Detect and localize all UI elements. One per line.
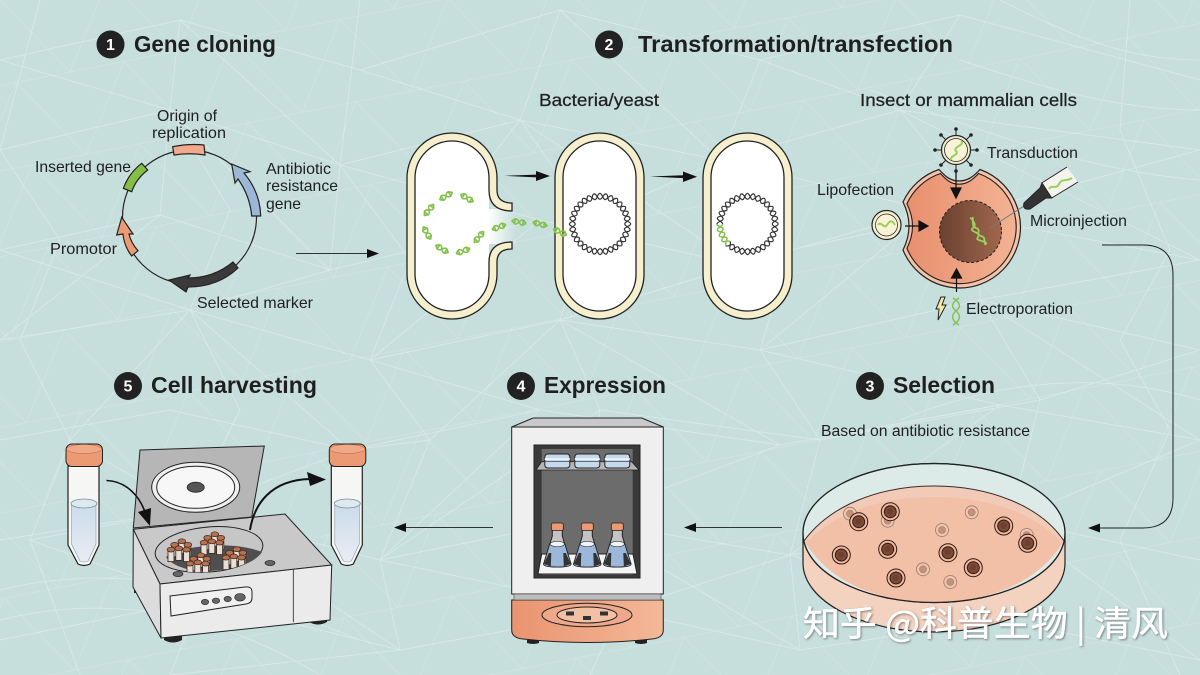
step 5 heading: 5	[124, 378, 133, 396]
origin of replication segment	[173, 145, 205, 155]
label: microinjection: Microinjection	[1030, 213, 1127, 230]
faint colonies	[844, 506, 1033, 588]
upper shelf with plates	[536, 454, 639, 470]
plasmid backbone	[122, 150, 256, 284]
arrow: electroporation	[952, 269, 962, 292]
mammalian cell	[903, 170, 1020, 288]
label: selected marker: Selected marker	[197, 295, 314, 312]
nuclear DNA	[970, 217, 987, 245]
promotor arrow	[117, 217, 138, 256]
control panel	[170, 587, 252, 616]
agar	[804, 486, 1064, 602]
label: antibiotic resistance gene: Antibiotic	[266, 161, 331, 178]
left tube	[66, 444, 102, 566]
lipid vesicle	[872, 210, 901, 240]
step 1 heading: 1	[106, 37, 115, 54]
subheading: insect or mammalian cells: Insect or mammalian cells	[860, 90, 1077, 110]
label: antibiotic resistance gene: gene	[266, 196, 301, 213]
dish base	[803, 535, 1065, 632]
bacterium with integrated gene	[703, 133, 792, 319]
step 5 heading: Cell harvesting	[151, 372, 317, 398]
step 4 heading: 4	[517, 378, 526, 396]
bacterium with opening	[407, 133, 548, 319]
step 3 heading	[856, 372, 995, 400]
label: antibiotic resistance gene	[266, 161, 338, 213]
shaker base	[512, 600, 663, 642]
label: origin of replication: replication	[152, 125, 226, 142]
nucleus	[940, 200, 1002, 262]
centrifuge front	[160, 565, 332, 638]
incubator body	[512, 427, 663, 594]
arrow: tube into centrifuge	[106, 480, 151, 526]
rotor tube clusters	[167, 532, 247, 576]
shaker controls	[542, 603, 632, 627]
label: electroporation: Electroporation	[966, 301, 1073, 318]
antibiotic resistance gene arrow	[232, 164, 261, 216]
selection description: Based on antibiotic resistance	[821, 423, 1030, 440]
arrow: lipofection	[905, 221, 928, 231]
centrifuge lid	[133, 446, 264, 528]
arrow: centrifuge to tube	[250, 472, 326, 530]
label: antibiotic resistance gene: resistance	[266, 178, 338, 195]
step 3 heading: Selection	[893, 372, 995, 398]
DNA fragments	[421, 190, 548, 256]
electroporation DNA	[953, 298, 959, 325]
incubator top	[512, 418, 663, 427]
centrifuge feet	[134, 585, 327, 642]
flasks	[544, 523, 631, 567]
rotor cavity	[153, 522, 265, 577]
microinjection pipette	[990, 167, 1078, 228]
petri dish	[803, 464, 1065, 632]
plasmid diagram	[35, 108, 338, 312]
lower tray	[538, 554, 637, 574]
centrifuge	[133, 446, 332, 642]
centrifuge top face	[133, 514, 332, 584]
label: lipofection: Lipofection	[817, 182, 894, 199]
right tube	[329, 444, 366, 566]
label: promotor: Promotor	[50, 241, 118, 258]
incubator window	[534, 445, 640, 578]
incubator shaker	[512, 418, 663, 644]
arrow: bacterium 1 to 2	[504, 171, 550, 181]
step 2 heading: 2	[605, 37, 614, 54]
virus particle	[933, 127, 979, 173]
dish lid	[803, 464, 1065, 602]
arrow: expression to harvesting	[394, 523, 493, 532]
lightning bolt	[936, 297, 946, 320]
label: origin of replication: Origin of	[157, 108, 218, 125]
centrifuge left side	[133, 529, 161, 638]
watermark: 知乎 @科普生物 | 清风	[803, 596, 1168, 647]
arrow: bacterium 2 to 3	[650, 172, 697, 182]
label: transduction: Transduction	[987, 145, 1078, 162]
inserted gene segment	[123, 163, 148, 192]
arrow: cell to selection plate	[1088, 245, 1173, 532]
label: origin of replication	[152, 108, 226, 142]
incubator feet	[527, 640, 647, 644]
step 1 heading: Gene cloning	[134, 31, 276, 57]
arrow: transduction	[951, 172, 961, 198]
step 4 heading: Expression	[544, 372, 666, 398]
selected marker arrow	[169, 262, 238, 292]
step 3 heading: 3	[866, 378, 875, 396]
bacterium with plasmid	[552, 133, 644, 319]
step 2 heading: Transformation/transfection	[638, 31, 953, 57]
label: inserted gene: Inserted gene	[35, 159, 131, 176]
subheading: bacteria/yeast: Bacteria/yeast	[539, 90, 659, 110]
arrow: selection to expression	[684, 523, 782, 532]
arrow: plasmid to bacteria	[296, 249, 379, 258]
resistant colonies	[832, 503, 1037, 587]
